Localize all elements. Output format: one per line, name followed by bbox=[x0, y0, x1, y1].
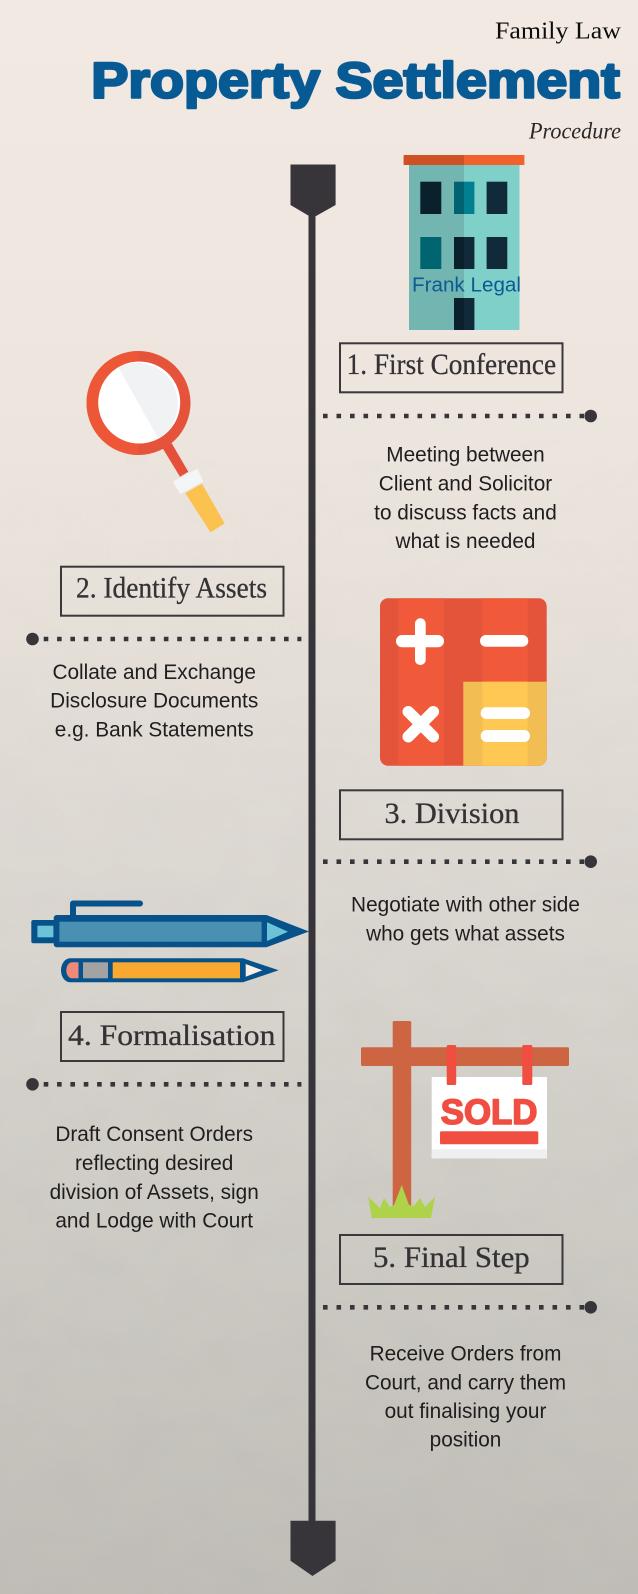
step 3 heading box bbox=[340, 790, 562, 839]
step 4 description: Draft Consent Orders bbox=[55, 1123, 253, 1146]
icon: sold sign on post bbox=[361, 1021, 569, 1218]
heading: Property Settlement: Property Settlement bbox=[91, 52, 620, 108]
step 5 heading box bbox=[340, 1235, 562, 1284]
step 3 heading box: 3. Division bbox=[384, 797, 520, 830]
step 4 heading box: 4. Formalisation bbox=[68, 1019, 275, 1052]
step 4 description bbox=[50, 1123, 259, 1233]
step 3 description bbox=[351, 894, 580, 946]
step 2 description: Collate and Exchange bbox=[52, 661, 256, 684]
step 2 description: Disclosure Documents bbox=[50, 690, 258, 713]
step 4 description: and Lodge with Court bbox=[55, 1210, 253, 1233]
step 1 description: what is needed bbox=[395, 530, 535, 553]
step 3 description: who gets what assets bbox=[365, 923, 565, 946]
step 5 dotted connector bbox=[323, 1301, 597, 1314]
step 2 heading box: 2. Identify Assets bbox=[76, 572, 267, 605]
step 5 description bbox=[365, 1343, 566, 1452]
step 5 description: position bbox=[430, 1429, 501, 1452]
step 2 heading box bbox=[61, 567, 284, 616]
step 1 heading box bbox=[340, 343, 562, 392]
pencil bbox=[61, 958, 279, 982]
timeline spine with shield ends bbox=[290, 164, 336, 1576]
step 1 heading box: 1. First Conference bbox=[347, 348, 556, 381]
step 3 dotted connector bbox=[323, 855, 597, 868]
icon: office building bbox=[404, 155, 524, 330]
step 1 description bbox=[374, 444, 557, 553]
step 2 description bbox=[50, 661, 258, 742]
step 2 description: e.g. Bank Statements bbox=[55, 719, 254, 742]
step 5 heading box: 5. Final Step bbox=[373, 1241, 530, 1274]
step 5 description: Court, and carry them bbox=[365, 1371, 566, 1394]
step 5 description: out finalising your bbox=[385, 1400, 546, 1423]
grass bbox=[368, 1185, 435, 1218]
pen bbox=[31, 904, 309, 947]
building label: Frank Legal bbox=[412, 274, 521, 296]
step 3 description: Negotiate with other side bbox=[351, 894, 580, 917]
title block bbox=[91, 18, 622, 144]
icon: sold sign on post: SOLD bbox=[441, 1093, 537, 1132]
subtitle: Procedure: Procedure bbox=[528, 118, 621, 144]
step 5 description: Receive Orders from bbox=[370, 1343, 561, 1366]
step 2 dotted connector bbox=[26, 633, 301, 645]
step 4 description: division of Assets, sign bbox=[50, 1181, 259, 1204]
icon: pen and pencil bbox=[31, 904, 309, 982]
step 1 dotted connector bbox=[323, 410, 597, 422]
step 4 heading box bbox=[61, 1012, 284, 1061]
icon: magnifying glass bbox=[86, 351, 224, 532]
step 4 description: reflecting desired bbox=[75, 1152, 233, 1175]
step 1 description: Client and Solicitor bbox=[379, 472, 552, 496]
step 1 description: Meeting between bbox=[386, 444, 545, 467]
step 1 description: to discuss facts and bbox=[374, 502, 557, 524]
icon: calculator bbox=[380, 598, 547, 766]
step 4 dotted connector bbox=[26, 1078, 301, 1091]
kicker: Family Law: Family Law bbox=[495, 18, 622, 44]
